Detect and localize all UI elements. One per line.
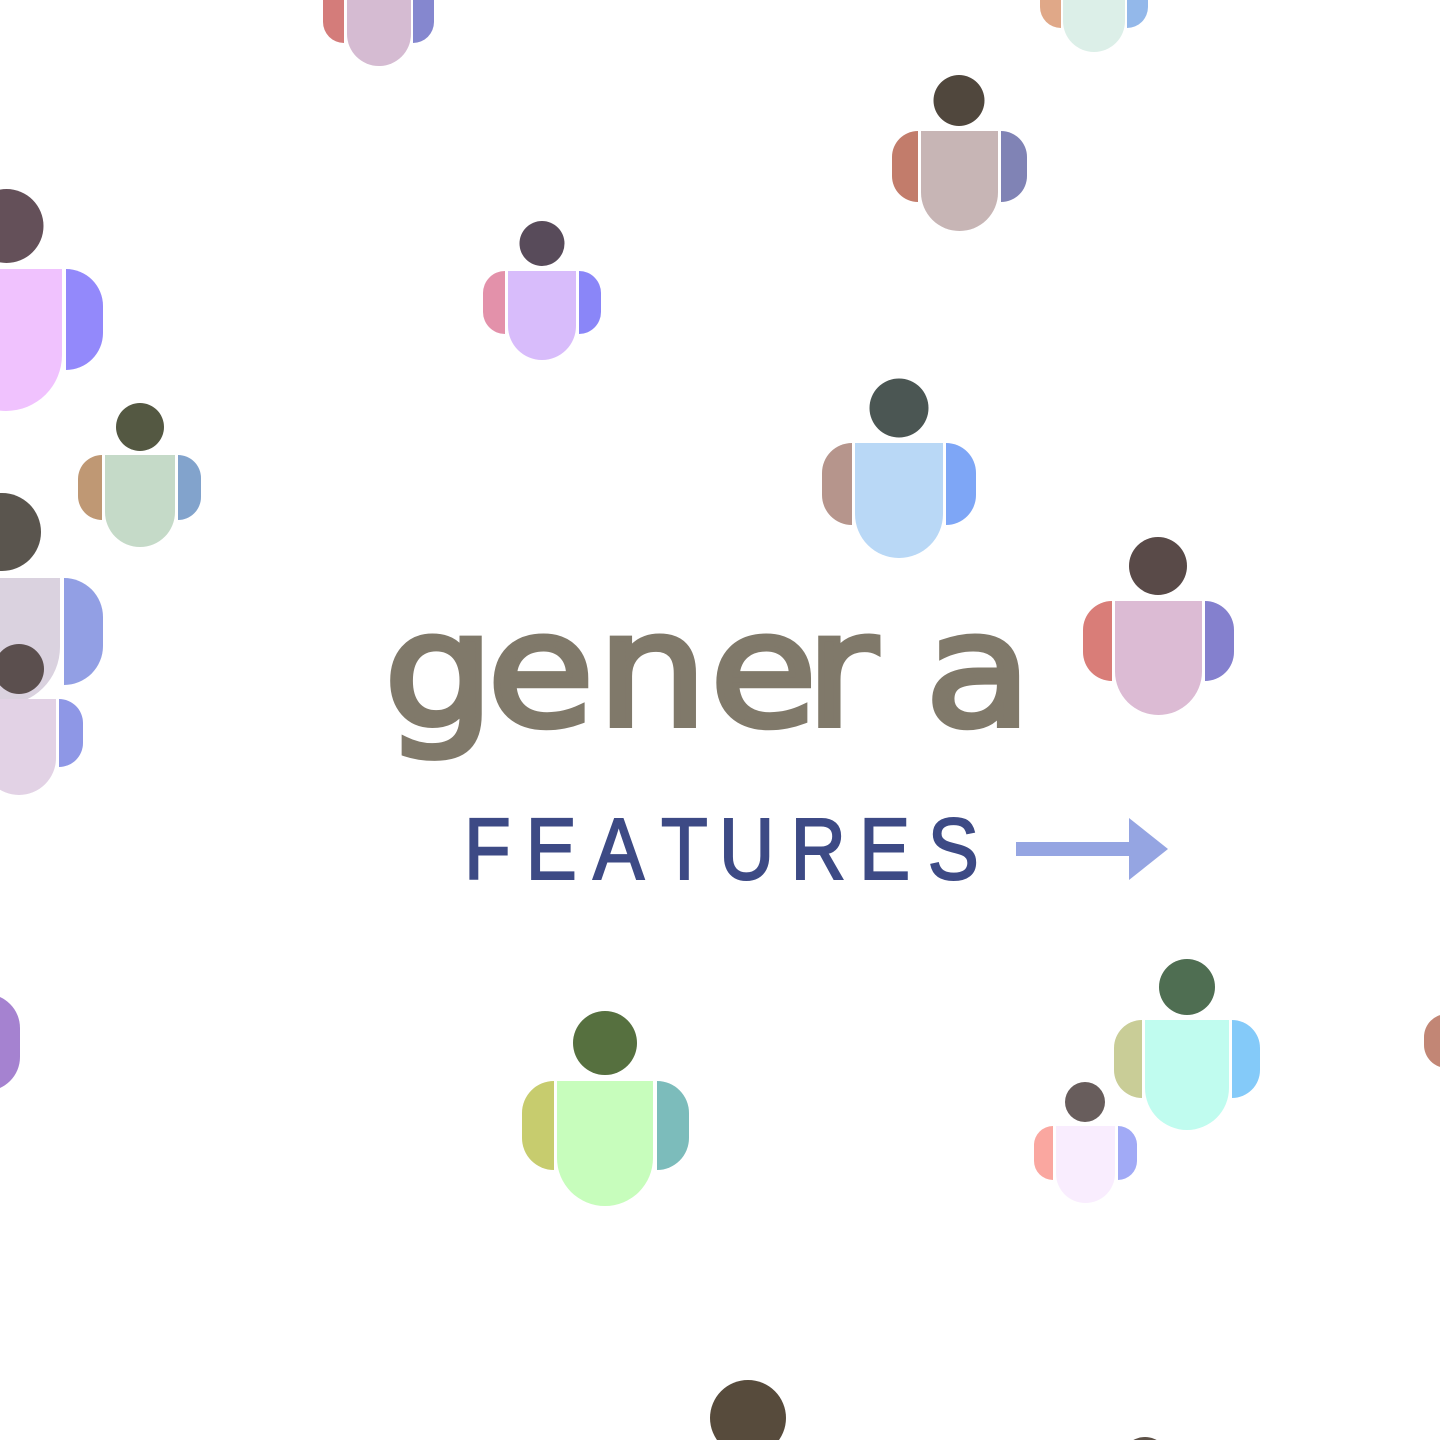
person: mauve right of logo [1083,537,1234,715]
arrow [1016,818,1168,880]
person: taupe top right [892,75,1027,231]
person: head cropped at bottom right [1121,1437,1169,1440]
person: pale mauve cropped left, overlapping [0,644,83,795]
person: head cropped at bottom centre [710,1380,786,1440]
person: terracotta arm cropped at right edge [1424,1014,1440,1068]
person: lilac upper centre [483,221,601,360]
person: sage green left [78,403,201,547]
person: pink cropped left [0,189,103,411]
person: grey-lilac cropped left [0,493,103,705]
person: purple arm cropped at left edge [0,994,20,1091]
person: mint green lower centre [522,1011,689,1206]
person: sky blue centre right [822,378,976,558]
person: aqua lower right [1114,959,1260,1130]
heading: features: FEATURES [464,801,979,898]
person: pale pink lower right [1034,1082,1137,1203]
person: cropped top right [1040,0,1148,52]
logo wordmark: genera [384,579,1032,763]
person: cropped top centre-left [323,0,434,66]
